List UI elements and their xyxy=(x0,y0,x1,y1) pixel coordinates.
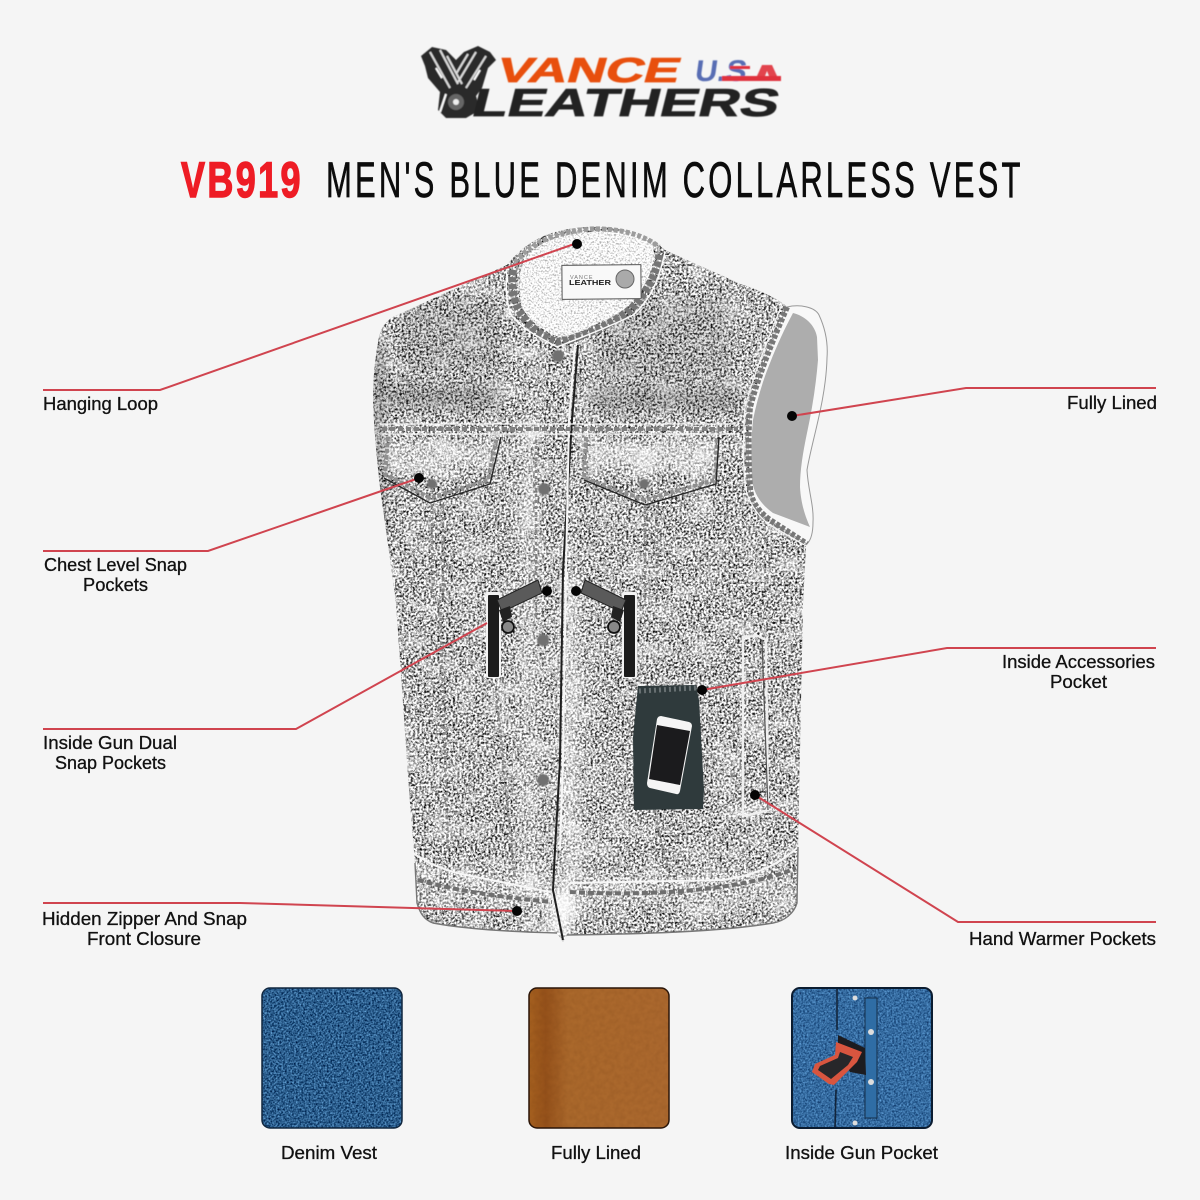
vertical stitching xyxy=(432,440,670,880)
swatch: fully lined leather xyxy=(529,988,669,1128)
icon: engine skull xyxy=(421,46,496,118)
neck label: LEATHER xyxy=(569,280,611,287)
title xyxy=(181,151,1020,208)
inner collar fleece xyxy=(520,231,654,337)
callout dots xyxy=(414,239,797,916)
label: Inside Gun Dual Snap Pockets xyxy=(43,733,177,773)
pocket flap: left chest xyxy=(384,437,501,503)
title: model number: VB919 xyxy=(181,153,301,208)
armhole lining xyxy=(748,306,827,544)
logo flag letter A and stripes xyxy=(722,65,781,81)
logo: Vance USA Leathers xyxy=(421,46,785,125)
pocket flap: right chest xyxy=(584,437,719,505)
icon: phone xyxy=(647,716,692,794)
front placket seam xyxy=(553,345,578,940)
caption: Denim Vest: Denim Vest xyxy=(281,1143,377,1163)
label: Inside Accessories Pocket: Inside Accessories xyxy=(1002,652,1155,672)
label: Hidden Zipper And Snap Front Closure xyxy=(42,909,247,949)
vest illustration xyxy=(360,220,840,950)
label: Hidden Zipper And Snap Front Closure: Hidden Zipper And Snap xyxy=(42,909,247,929)
collar hem xyxy=(506,229,665,347)
label: Inside Gun Dual Snap Pockets: Inside Gun Dual xyxy=(43,733,177,753)
title: product name: MEN'S BLUE DENIM COLLARLESS VEST xyxy=(326,151,1020,208)
accessories pouch with phone xyxy=(633,685,704,810)
dark wash shadows xyxy=(372,300,740,540)
logo word: LEATHERS: LEATHERS xyxy=(468,82,785,125)
label: Hidden Zipper And Snap Front Closure: Front Closure xyxy=(87,929,201,949)
waistband xyxy=(413,847,798,935)
label: Hanging Loop: Hanging Loop xyxy=(43,394,158,414)
vest body texture xyxy=(373,226,806,942)
logo word: VANCE: VANCE xyxy=(493,51,686,90)
armhole seam xyxy=(748,307,807,544)
swatch: denim vest xyxy=(262,988,402,1128)
neck label: VANCE xyxy=(570,275,594,281)
caption: Fully Lined: Fully Lined xyxy=(551,1143,641,1163)
label: Hand Warmer Pockets: Hand Warmer Pockets xyxy=(969,929,1156,949)
label: Chest Level Snap Pockets xyxy=(44,555,187,595)
logo word: USA: U.S. xyxy=(693,55,758,88)
neck label xyxy=(562,265,641,299)
callout lines xyxy=(43,243,1156,922)
icon: right pistol xyxy=(581,580,637,678)
light wash streaks xyxy=(385,430,800,935)
icon: gun xyxy=(812,1035,866,1085)
hand warmer pocket xyxy=(743,636,768,816)
yoke seam xyxy=(380,424,738,434)
label: Fully Lined: Fully Lined xyxy=(1067,393,1157,413)
label: Inside Accessories Pocket: Pocket xyxy=(1050,672,1107,692)
swatch: inside gun pocket xyxy=(792,988,932,1128)
icon: left pistol xyxy=(486,580,542,678)
caption: Inside Gun Pocket: Inside Gun Pocket xyxy=(785,1143,938,1163)
snap buttons xyxy=(427,350,649,786)
label: Chest Level Snap Pockets: Pockets xyxy=(83,575,148,595)
label: Inside Accessories Pocket xyxy=(1002,652,1155,692)
label: Chest Level Snap Pockets: Chest Level Snap xyxy=(44,555,187,575)
label: Inside Gun Dual Snap Pockets: Snap Pockets xyxy=(55,753,166,773)
